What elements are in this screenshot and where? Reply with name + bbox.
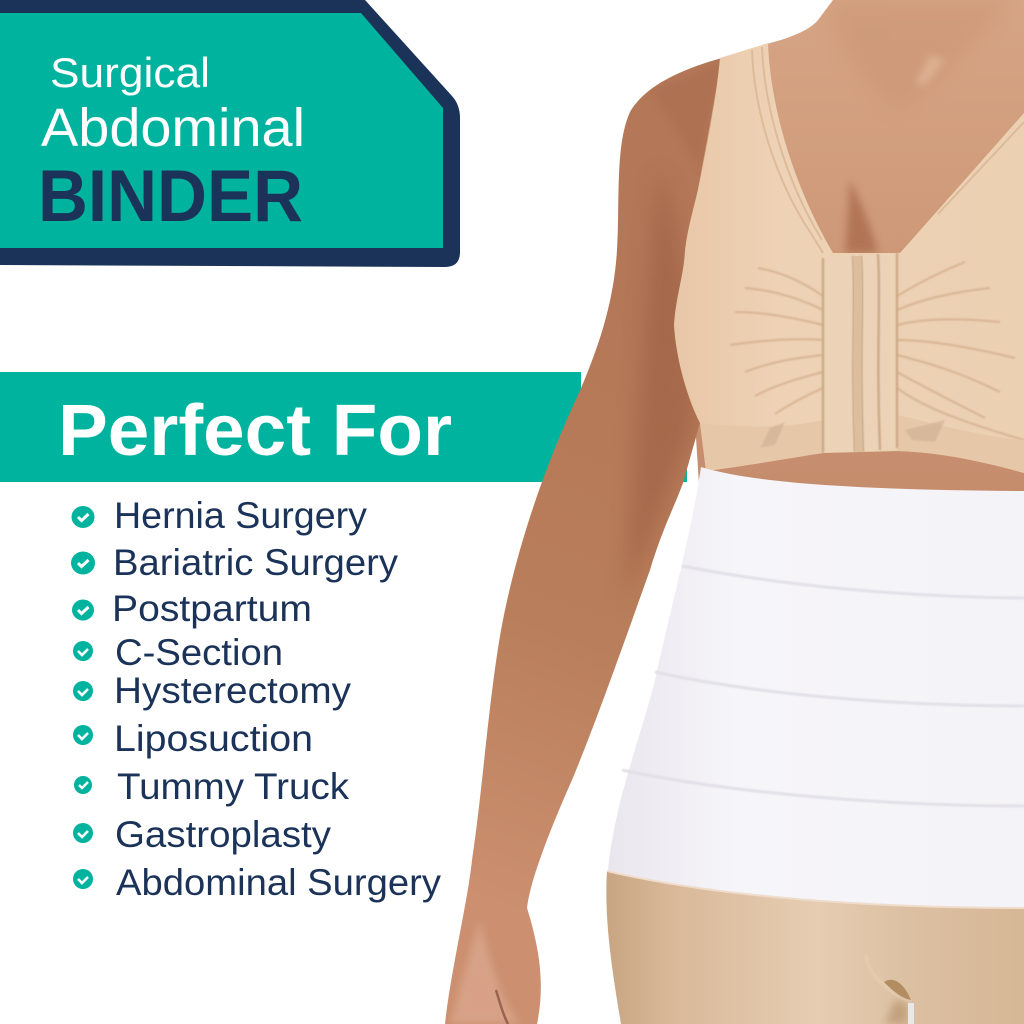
cleavage shadow xyxy=(845,180,878,253)
title line: Surgical: Surgical xyxy=(50,49,210,96)
strap edge lines xyxy=(752,47,1024,253)
crotch seam xyxy=(866,955,911,1002)
item: Liposuction: Liposuction xyxy=(114,718,313,759)
shorts fabric xyxy=(606,871,1024,1024)
title banner xyxy=(0,0,460,267)
waist edge xyxy=(607,871,1024,908)
binder body xyxy=(608,467,1024,908)
bra under band xyxy=(700,415,1024,473)
shorts xyxy=(606,871,1024,1024)
item: Bariatric Surgery: Bariatric Surgery xyxy=(113,542,399,583)
band heading: Perfect For xyxy=(58,391,452,471)
neck highlight xyxy=(916,56,942,86)
title line: Abdominal: Abdominal xyxy=(41,98,305,158)
neck shadow xyxy=(842,10,976,78)
item: Abdominal Surgery: Abdominal Surgery xyxy=(116,862,442,903)
arm shading xyxy=(450,60,722,1024)
closure columns xyxy=(823,253,897,453)
checklist xyxy=(71,495,442,903)
bra gathers xyxy=(730,262,1024,440)
item: Postpartum: Postpartum xyxy=(112,588,312,629)
closure hook strip xyxy=(853,256,863,452)
binder xyxy=(608,467,1024,908)
inner thigh shadow xyxy=(885,1000,908,1024)
item: Tummy Truck: Tummy Truck xyxy=(117,766,350,807)
banner navy frame xyxy=(0,0,460,267)
arm xyxy=(445,58,722,1024)
crotch shadow xyxy=(884,980,911,1000)
finger crease xyxy=(496,990,508,1024)
item: Hysterectomy: Hysterectomy xyxy=(114,670,352,711)
leg gap xyxy=(908,1003,914,1024)
item: C-Section: C-Section xyxy=(115,632,283,673)
bra xyxy=(674,43,1024,473)
title line: BINDER: BINDER xyxy=(38,156,303,237)
banner teal panel xyxy=(0,13,443,248)
bra body xyxy=(674,43,1024,473)
binder fold lines xyxy=(622,566,1024,806)
item: Hernia Surgery: Hernia Surgery xyxy=(114,495,367,536)
item: Gastroplasty: Gastroplasty xyxy=(115,814,332,855)
torso skin xyxy=(684,0,1024,500)
photo: woman wearing abdominal binder xyxy=(445,0,1024,1024)
front closure xyxy=(823,253,897,453)
section band: Perfect For xyxy=(0,372,687,482)
neck shading xyxy=(842,10,976,82)
band background xyxy=(0,372,687,482)
band lace motifs xyxy=(760,420,945,448)
